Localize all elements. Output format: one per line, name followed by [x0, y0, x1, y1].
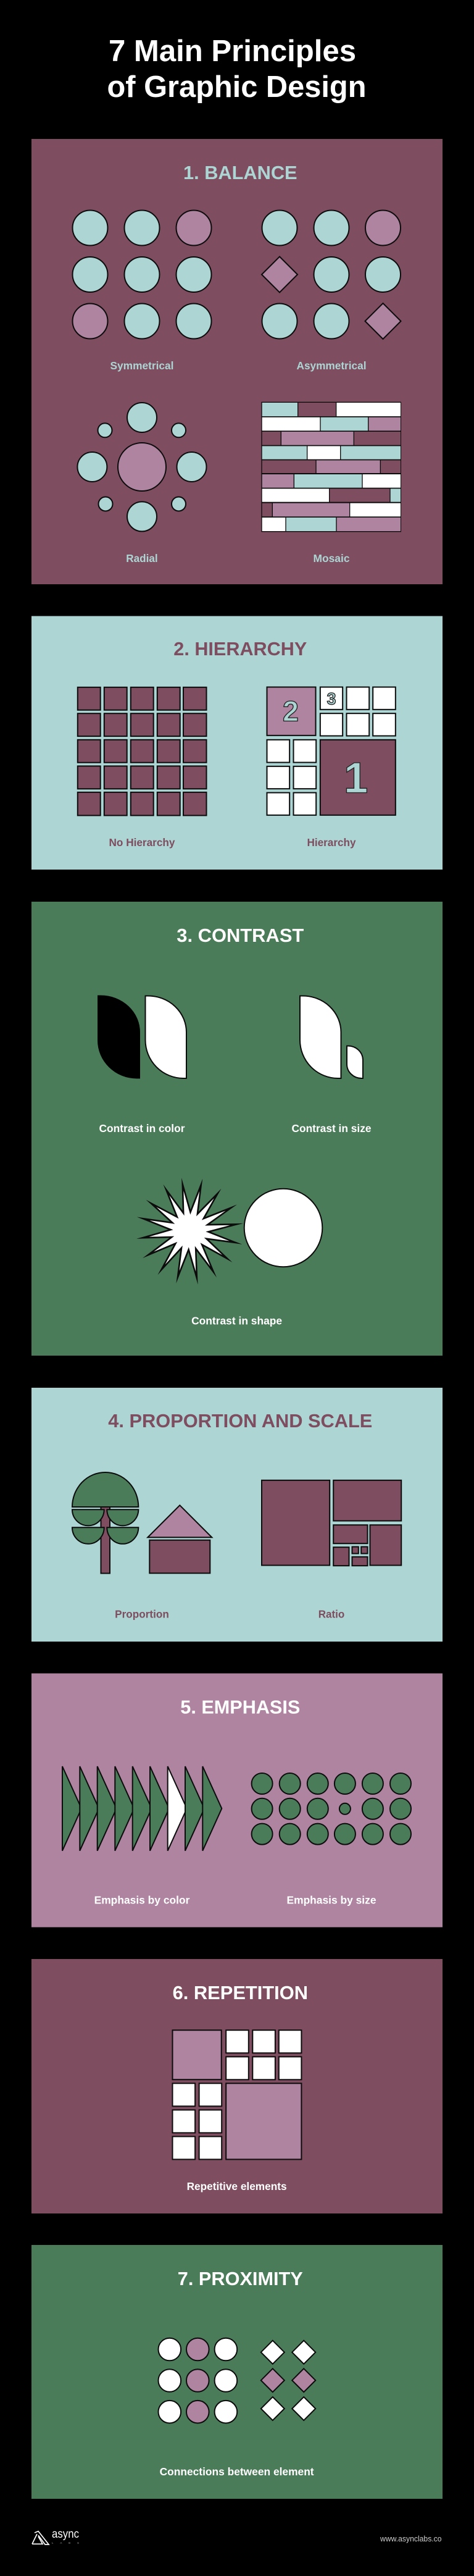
- symmetrical circles: [73, 210, 211, 338]
- arrows row: [62, 1766, 222, 1851]
- panel: emphasis: [31, 1674, 443, 1927]
- tree: [72, 1472, 138, 1574]
- ratio rectangles: [262, 1480, 401, 1566]
- heading: proximity: 7. PROXIMITY: [178, 2268, 303, 2289]
- circle: [244, 1189, 322, 1267]
- panel: contrast: [31, 902, 443, 1356]
- label: asymmetrical: Asymmetrical: [296, 359, 367, 372]
- label: emphasis by size: Emphasis by size: [286, 1894, 376, 1907]
- heading: repetition: 6. REPETITION: [173, 1982, 308, 2003]
- label: hierarchy: Hierarchy: [307, 836, 356, 849]
- label: contrast in size: Contrast in size: [291, 1122, 372, 1135]
- label: no hierarchy: No Hierarchy: [109, 836, 175, 849]
- numeral 2: 2: [283, 695, 299, 728]
- leaves: contrast in color: [98, 996, 186, 1078]
- panel: balance: [31, 139, 443, 584]
- heading: balance: 1. BALANCE: [183, 162, 297, 183]
- title: 7 Main Principles: [109, 35, 356, 68]
- leaves: contrast in size: [300, 996, 363, 1078]
- footer logo: async labs: [32, 2528, 79, 2545]
- heading: proportion and scale: 4. PROPORTION AND SCALE: [108, 1411, 372, 1432]
- label: radial: Radial: [126, 552, 158, 564]
- label: connections between element: Connections between element: [160, 2465, 314, 2478]
- wordmark: async: async: [52, 2528, 79, 2541]
- label: proportion: Proportion: [115, 1608, 169, 1620]
- starburst: [143, 1185, 237, 1278]
- footer url: www.asynclabs.co: [380, 2534, 442, 2543]
- label: symmetrical: Symmetrical: [110, 359, 174, 372]
- house: [148, 1505, 212, 1573]
- label: emphasis by color: Emphasis by color: [94, 1894, 190, 1907]
- panel: hierarchy: [31, 616, 443, 870]
- heading: contrast: 3. CONTRAST: [177, 925, 304, 946]
- heading: emphasis: 5. EMPHASIS: [180, 1697, 300, 1718]
- circles group: [158, 2338, 237, 2423]
- title: [107, 35, 367, 104]
- panel: proximity: [31, 2245, 443, 2499]
- wordmark: labs: LABS: [52, 2541, 79, 2545]
- label: ratio: Ratio: [318, 1608, 344, 1620]
- label: repetitive elements: Repetitive elements: [187, 2180, 287, 2192]
- diamonds group: [261, 2341, 315, 2420]
- panel: repetition: [31, 1959, 443, 2213]
- radial circles: [77, 403, 206, 531]
- mosaic: [261, 402, 401, 532]
- label: contrast in color: Contrast in color: [99, 1122, 185, 1135]
- dots grid: [252, 1773, 411, 1845]
- label: mosaic: Mosaic: [314, 552, 350, 564]
- title: of Graphic Design: [107, 70, 367, 104]
- panel: proportion and scale: [31, 1388, 443, 1642]
- numeral 3: 3: [327, 690, 336, 708]
- hierarchy grid: [267, 687, 396, 815]
- label: contrast in shape: Contrast in shape: [191, 1314, 282, 1327]
- no hierarchy grid: [78, 687, 206, 815]
- repeating squares: [173, 2030, 301, 2159]
- icon: triangle logo mark: [32, 2531, 49, 2545]
- numeral 1: 1: [344, 753, 368, 802]
- asymmetrical shapes: [262, 210, 401, 339]
- heading: hierarchy: 2. HIERARCHY: [173, 639, 307, 660]
